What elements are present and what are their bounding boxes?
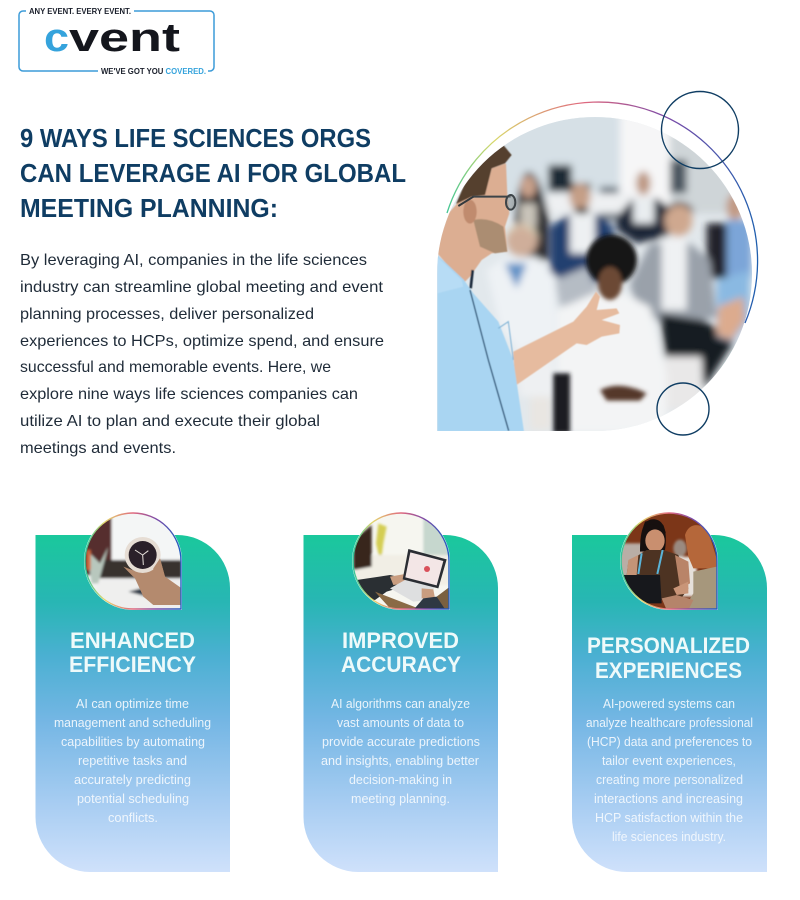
thumbnail: two women talking <box>620 512 720 612</box>
card body text: (HCP) data and preferences to <box>587 735 752 749</box>
photo: presenter speaking to seated audience <box>433 110 760 437</box>
card body text: accurately predicting <box>74 773 191 787</box>
card background <box>572 535 767 872</box>
intro text block: planning processes, deliver personalized <box>20 306 314 323</box>
card heading: PERSONALIZED <box>587 633 750 658</box>
title: MEETING PLANNING: <box>20 193 278 223</box>
card body text: meeting planning. <box>351 792 450 806</box>
card body text: and insights, enabling better <box>321 754 479 768</box>
logo: cvent: WE'VE GOT YOU COVERED. <box>101 67 206 76</box>
card body text: repetitive tasks and <box>78 754 187 768</box>
card body text: tailor event experiences, <box>602 754 736 768</box>
intro text block: explore nine ways life sciences companies can <box>20 386 358 403</box>
intro text block <box>20 252 384 457</box>
card body text: decision-making in <box>349 773 452 787</box>
panel: improved accuracy <box>304 512 498 872</box>
title <box>20 123 406 223</box>
thumbnail: hand holding clock <box>83 512 183 612</box>
card body text: conflicts. <box>108 811 158 825</box>
card body text: HCP satisfaction within the <box>595 811 743 825</box>
intro text block: meetings and events. <box>20 440 176 457</box>
card heading: IMPROVED <box>342 628 459 653</box>
intro text block: By leveraging AI, companies in the life sciences <box>20 252 367 269</box>
card body text <box>54 697 211 825</box>
card body text <box>586 697 753 844</box>
card body text <box>321 697 480 806</box>
card heading <box>69 628 196 677</box>
title: CAN LEVERAGE AI FOR GLOBAL <box>20 158 406 188</box>
logo: cvent <box>19 6 214 76</box>
card body text: AI algorithms can analyze <box>331 697 470 711</box>
rainbow arc around photo <box>447 102 758 323</box>
decorative large circle outline <box>662 92 738 168</box>
title: 9 WAYS LIFE SCIENCES ORGS <box>20 123 371 153</box>
card heading: ACCURACY <box>341 652 461 677</box>
panel: enhanced efficiency <box>35 512 230 872</box>
card body text: interactions and increasing <box>594 792 743 806</box>
logo: cvent: c <box>44 16 69 60</box>
card background <box>304 535 498 872</box>
intro text block: utilize AI to plan and execute their global <box>20 413 320 430</box>
card body text: potential scheduling <box>77 792 189 806</box>
card body text: management and scheduling <box>54 716 211 730</box>
card heading <box>341 628 461 677</box>
thumbnail: laptop with charts <box>352 512 452 612</box>
decorative small circle outline <box>657 383 709 435</box>
logo: cvent: ANY EVENT. EVERY EVENT. <box>29 7 131 16</box>
card body text: creating more personalized <box>596 773 743 787</box>
panel: personalized experiences <box>572 512 767 872</box>
card body text: analyze healthcare professional <box>586 716 753 730</box>
card body text: AI can optimize time <box>76 697 189 711</box>
card heading <box>587 633 750 683</box>
intro text block: successful and memorable events. Here, we <box>20 359 331 376</box>
card body text: life sciences industry. <box>612 830 726 844</box>
card background <box>35 535 230 872</box>
card body text: AI-powered systems can <box>603 697 735 711</box>
intro text block: industry can streamline global meeting and event <box>20 279 384 296</box>
card heading: EFFICIENCY <box>69 652 196 677</box>
logo: cvent: vent <box>69 16 180 60</box>
card heading: ENHANCED <box>70 628 195 653</box>
card heading: EXPERIENCES <box>595 658 742 683</box>
intro text block: experiences to HCPs, optimize spend, and ensure <box>20 333 384 350</box>
card body text: vast amounts of data to <box>337 716 464 730</box>
card body text: provide accurate predictions <box>322 735 480 749</box>
card body text: capabilities by automating <box>61 735 205 749</box>
